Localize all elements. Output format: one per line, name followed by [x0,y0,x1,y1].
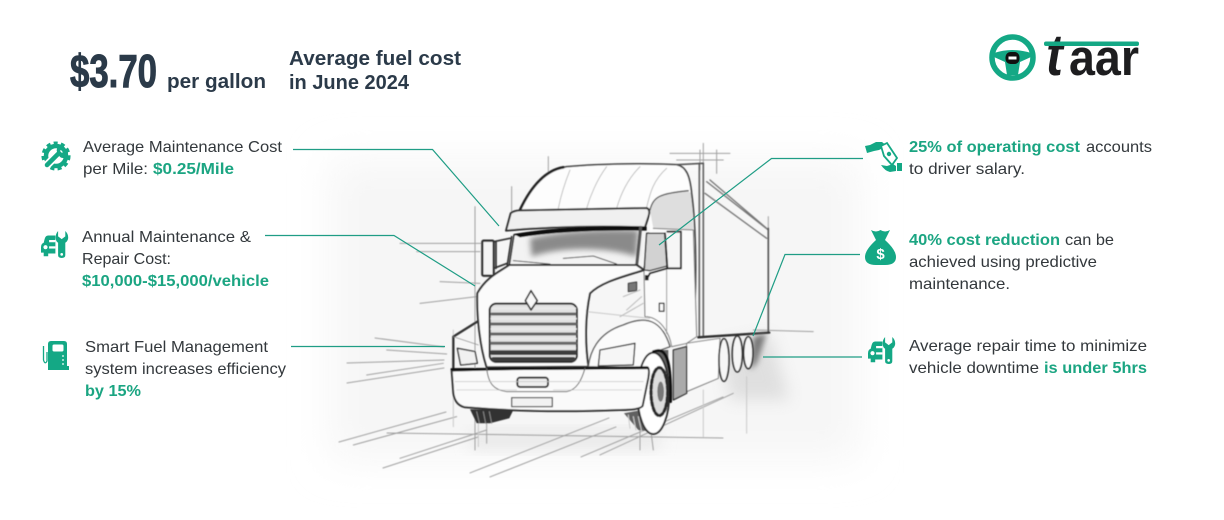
sleeper roof fairing [520,163,703,330]
road and construction lines [339,143,813,477]
icon: money bag [865,230,896,265]
text: cost reduction: 40% cost reduction [909,232,1060,249]
wordmark: aar [1069,29,1139,86]
text: maintenance cost [83,139,283,178]
text: cost reduction: can be [1065,232,1114,249]
emblem [525,291,537,310]
text: repair time: Average repair time to minimize [909,338,1147,355]
left fender and headlight [453,322,478,368]
text: driver salary: to driver salary. [909,161,1025,178]
panel: repair time [868,337,1147,377]
logo: Taar [992,23,1139,88]
per gallon unit: per gallon [167,70,266,93]
text: annual cost [82,229,269,290]
panel: smart fuel management [44,339,286,400]
cab side and door [644,228,697,347]
icon: car and wrench [41,231,68,258]
soft sketch background [330,160,860,460]
front bumper [452,367,649,411]
panel: annual maintenance and repair [41,229,269,290]
text: cost reduction: maintenance. [909,276,1010,293]
text: fuel management: system increases efficiency [85,361,286,378]
left mirror [482,237,512,276]
trailer [698,163,769,370]
text: cost reduction [909,232,1114,293]
text: cost reduction: achieved using predictive [909,254,1097,271]
icon: hands and money [865,142,902,172]
text: repair time [909,338,1147,377]
windshield [509,226,647,265]
wordmark [1044,23,1139,88]
text: fuel management: Smart Fuel Management [85,339,269,356]
fuel cost caption: Average fuel cost [289,47,461,70]
text: driver salary [909,139,1152,178]
sun visor [506,208,649,231]
truck sketch [330,143,860,477]
text: maintenance cost: Average Maintenance Cost [83,139,283,156]
text: annual cost: Repair Cost: [82,251,171,268]
right fender and headlight [588,282,670,368]
price figure: $3.70 [70,45,157,97]
icon: car and wrench [868,337,895,364]
panel: cost reduction [865,230,1114,293]
panel: maintenance cost per mile [43,139,283,178]
text: maintenance cost: $0.25/Mile [153,161,234,178]
rear wheels [687,336,753,392]
text: annual cost: Annual Maintenance & [82,229,251,246]
text: repair time: is under 5hrs [1044,360,1147,377]
icon: fuel pump [44,341,69,370]
text: annual cost: $10,000-$15,000/vehicle [82,273,269,290]
fuel cost caption: in June 2024 [289,71,410,94]
icon: money bag: $ [876,246,885,263]
side window and mirror [644,232,681,280]
text: maintenance cost: per Mile: [83,161,148,178]
left front tyre [470,409,513,423]
icon: wrench in gear [43,143,69,169]
text: fuel management [85,339,286,400]
front wheel [624,347,687,434]
hood [477,265,644,367]
callout leader lines [265,150,863,357]
fuel cost caption [289,47,461,94]
wordmark: t [1046,23,1065,88]
fuel price heading [70,45,461,97]
steering wheel icon [992,37,1033,78]
text: driver salary: accounts [1086,139,1152,156]
grille [490,304,577,362]
panel: driver salary [865,139,1152,178]
text: driver salary: 25% of operating cost [909,139,1081,156]
text: repair time: vehicle downtime [909,360,1039,377]
text: fuel management: by 15% [85,383,141,400]
